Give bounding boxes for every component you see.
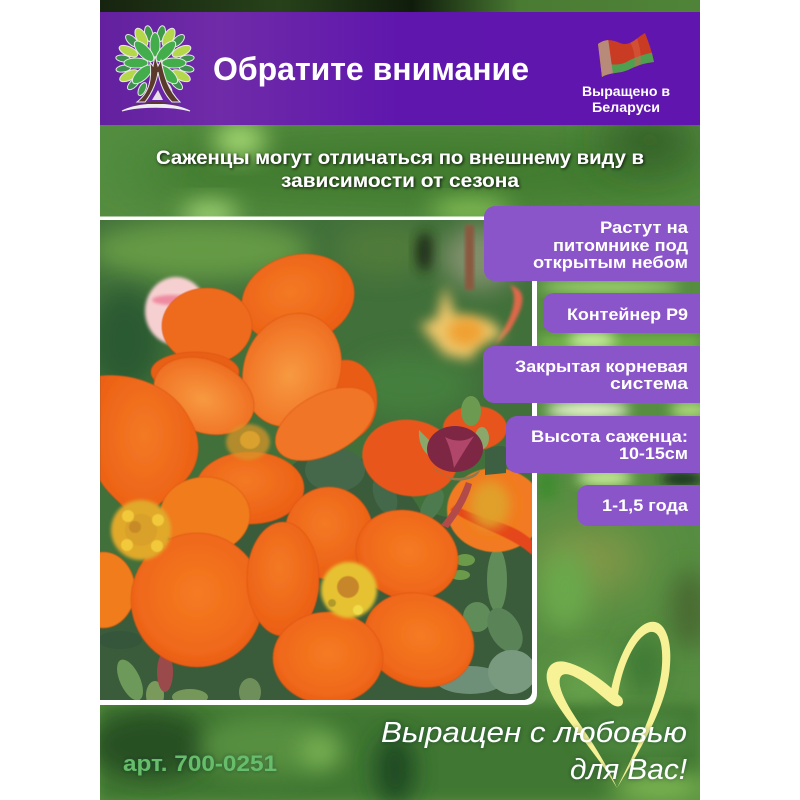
flower: right — [356, 406, 543, 555]
flower: left — [100, 374, 260, 668]
subtitle notice: зависимости от сезона — [281, 171, 519, 192]
flower bud — [419, 396, 506, 528]
flag caption: Выращено в — [582, 83, 670, 99]
pill: growing conditions: Растут на — [600, 219, 689, 237]
article number: арт. 700-0251 — [123, 751, 277, 776]
subtitle notice: Саженцы могут отличаться по внешнему виду в — [156, 148, 644, 169]
photo: orange potentilla flowers — [100, 220, 532, 700]
title: Обратите внимание — [213, 51, 529, 87]
flower: bottom centre — [247, 487, 487, 704]
pill: seedling height: Высота саженца: — [531, 428, 688, 446]
pill: container: Контейнер Р9 — [567, 306, 688, 324]
pill: root system: Закрытая корневая — [515, 358, 688, 376]
pill: seedling height — [506, 416, 710, 473]
slogan: Выращен с любовью — [381, 717, 687, 749]
flower: top back — [150, 253, 356, 381]
icon: tree logo — [115, 25, 195, 111]
subtitle notice — [156, 148, 644, 192]
photo frame — [100, 216, 537, 705]
pill: growing conditions: открытым небом — [533, 254, 688, 272]
flag caption — [582, 83, 670, 115]
foliage lower area — [98, 448, 536, 709]
icon: Belarus flag — [596, 33, 654, 80]
icon: hand-drawn heart — [547, 622, 670, 788]
green bokeh background — [90, 0, 720, 800]
slogan: для Вас! — [570, 754, 687, 786]
pill: age: 1-1,5 года — [602, 497, 689, 515]
flag caption: Беларуси — [592, 99, 660, 115]
pill: root system: система — [610, 375, 689, 393]
slogan — [381, 717, 687, 786]
pill: container — [543, 293, 710, 333]
pill: growing conditions: питомнике под — [553, 237, 689, 255]
pill: root system — [483, 346, 710, 403]
infographic card — [100, 0, 700, 800]
flower: middle — [153, 312, 378, 525]
pill: growing conditions — [484, 206, 710, 281]
pill: seedling height: 10-15см — [619, 445, 688, 463]
purple header band — [100, 12, 700, 125]
white page margin right — [700, 0, 800, 800]
pill: age — [577, 485, 710, 526]
